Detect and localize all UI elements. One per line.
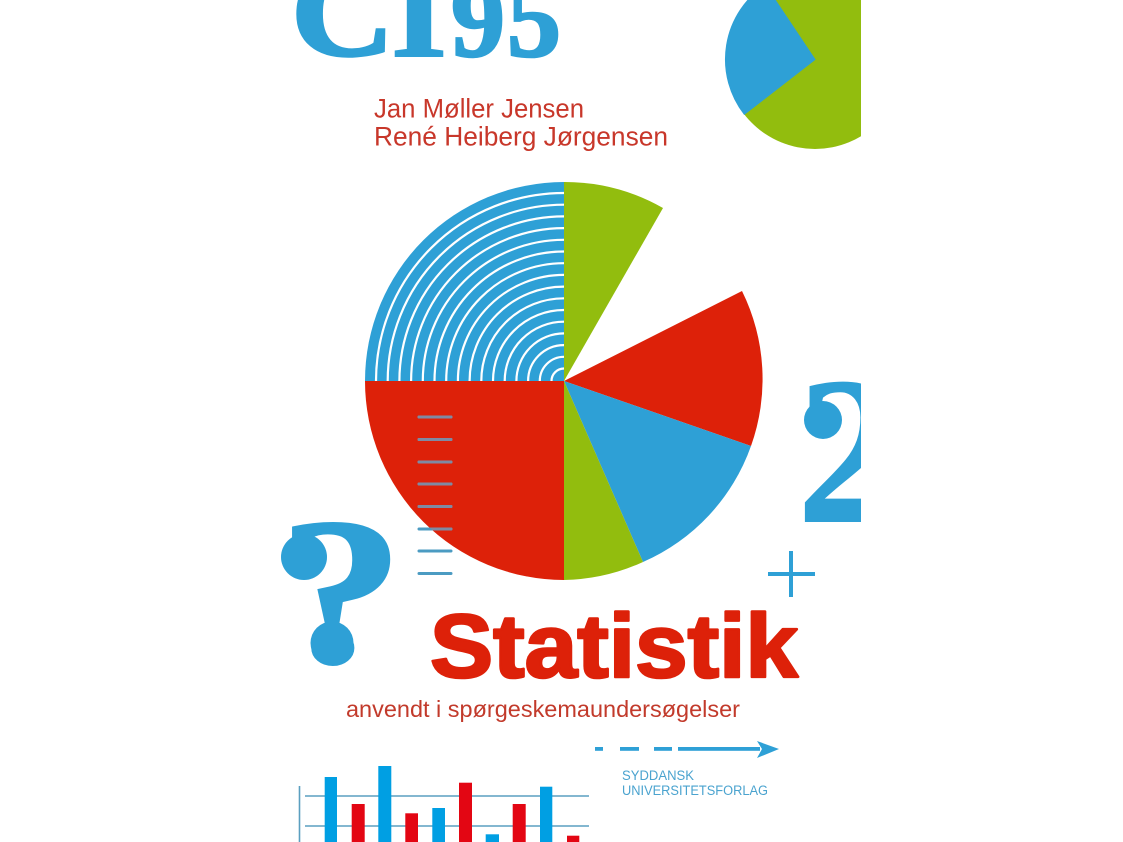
arrow [595,741,779,758]
numeral 2 [804,382,861,522]
red bars [352,783,579,842]
small pie chart, top right [724,0,861,149]
title: Statistik [430,597,799,697]
blue bars [325,766,552,842]
slice: green bottom [564,381,643,580]
slice: red lower left [365,381,564,580]
main pie chart [365,182,763,580]
publisher: SYDDANSK [622,768,694,783]
plus sign [768,551,815,597]
authors [374,94,668,152]
scale ticks [419,417,451,574]
slice: blue [725,0,815,114]
slice: red right [564,291,763,446]
slice: blue upper left with white rings [365,182,564,381]
slice: green top [564,182,663,381]
authors: René Heiberg Jørgensen [374,122,668,152]
publisher [622,768,768,798]
bar chart [300,766,589,842]
numeral 2: 2 [796,333,902,568]
slice: blue lower right [564,381,751,562]
question mark: ? [278,476,404,708]
publisher: UNIVERSITETSFORLAG [622,783,768,798]
slice: green [744,0,861,149]
axis and grid lines [300,786,589,842]
subtitle: anvendt i spørgeskemaundersøgelser [346,696,740,722]
authors: Jan Møller Jensen [374,94,584,124]
big heading: CI95 [291,0,561,84]
